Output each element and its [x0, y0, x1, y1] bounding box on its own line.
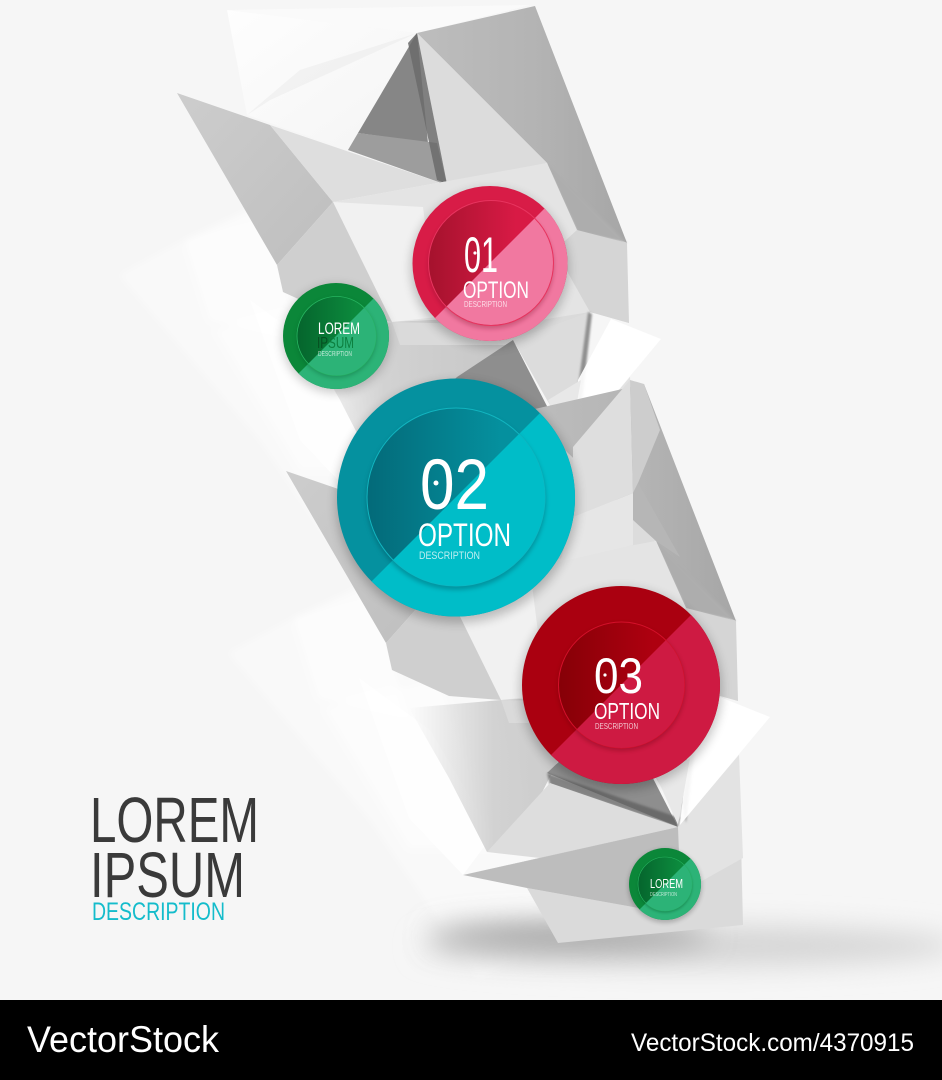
- badge green small lower: [628, 848, 702, 923]
- option label: OPTION: [463, 277, 529, 304]
- title line ipsum: IPSUM: [90, 839, 245, 911]
- number 03: 03: [594, 648, 643, 704]
- soft white background shards lower: [229, 578, 558, 978]
- ground shadow: [420, 923, 942, 966]
- number 02: 02: [420, 446, 489, 525]
- description label: DESCRIPTION: [650, 892, 677, 898]
- soft white background shards upper: [120, 200, 449, 600]
- lower polygon shards: [286, 384, 770, 943]
- badge 01 pink: [411, 186, 569, 347]
- description label: DESCRIPTION: [595, 721, 638, 731]
- option label: OPTION: [594, 698, 660, 724]
- badge green small upper: [282, 283, 390, 393]
- light overlay shards beside teal badge: [560, 380, 680, 760]
- badge 03 red: [520, 586, 722, 790]
- footer bar: [0, 1000, 942, 1080]
- lorem label: LOREM: [318, 320, 360, 338]
- title line lorem: LOREM: [90, 784, 259, 856]
- ipsum label: IPSUM: [317, 335, 354, 352]
- badge 02 teal: [336, 378, 578, 623]
- description label: DESCRIPTION: [318, 351, 352, 358]
- main title: [90, 784, 259, 926]
- number 01: 01: [464, 227, 498, 283]
- top white shards: [227, 5, 530, 150]
- upper polygon shards: [177, 6, 661, 565]
- title description: DESCRIPTION: [92, 898, 225, 926]
- footer url: VectorStock.com/4370915: [631, 1029, 914, 1057]
- description label: DESCRIPTION: [419, 550, 480, 562]
- lorem label: LOREM: [650, 877, 683, 891]
- description label: DESCRIPTION: [464, 299, 507, 309]
- footer logo: VectorStock: [27, 1019, 219, 1060]
- option label: OPTION: [418, 517, 511, 553]
